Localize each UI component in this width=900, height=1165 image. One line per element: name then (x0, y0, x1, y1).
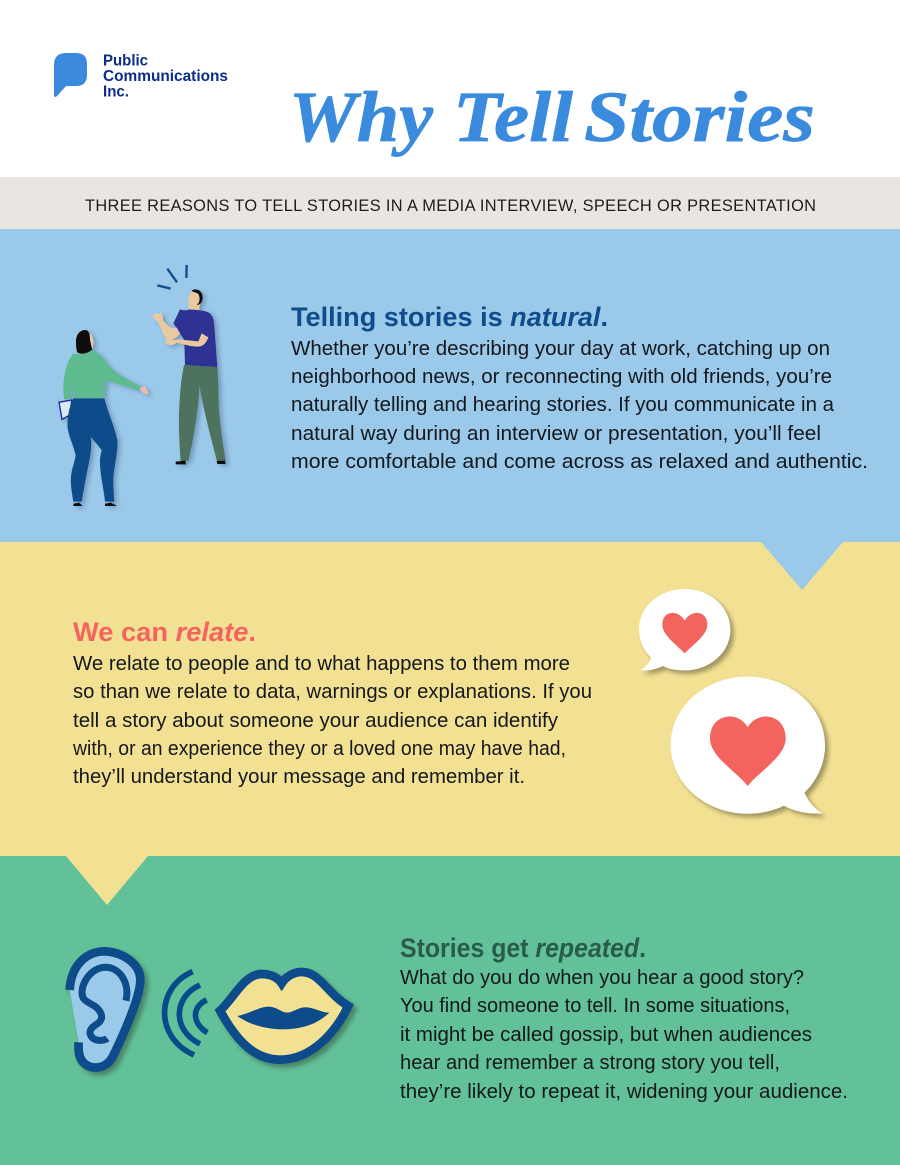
pointer: blue arrow (761, 542, 843, 590)
title (289, 77, 815, 157)
body text: tell a story about someone your audience can identify (73, 710, 558, 732)
body text: more comfortable and come across as relaxed and authentic. (291, 451, 868, 473)
body text: hear and remember a strong story you tell, (400, 1052, 780, 1074)
illustration: two people talking (59, 265, 226, 506)
body text: so than we relate to data, warnings or explanations. If you (73, 681, 592, 703)
woman (59, 330, 149, 506)
title: Tell (453, 77, 573, 157)
body text: natural way during an interview or presentation, you’ll feel (291, 423, 821, 445)
body text: they’re likely to repeat it, widening your audience. (400, 1081, 848, 1103)
body text (72, 653, 592, 788)
body text: neighborhood news, or reconnecting with old friends, you’re (291, 366, 832, 388)
pointer: yellow arrow (66, 856, 148, 905)
emphasis lines (157, 265, 187, 289)
body text: it might be called gossip, but when audiences (400, 1024, 812, 1046)
title: Why (289, 77, 434, 157)
man (152, 289, 226, 464)
body text: naturally telling and hearing stories. If you communicate in a (291, 394, 835, 416)
icon: ear, sound waves and lips (70, 951, 348, 1068)
heading: Stories get repeated. (400, 933, 646, 963)
logo: Public Communications Inc. (54, 52, 228, 100)
body text: they’ll understand your message and remember it. (73, 766, 525, 788)
icon: speech bubble logo (54, 53, 87, 97)
title: Stories (584, 77, 815, 157)
body text: You find someone to tell. In some situations, (400, 995, 790, 1017)
ear (70, 951, 140, 1068)
subtitle band (0, 177, 900, 229)
panel: relate (0, 542, 900, 856)
small bubble (639, 589, 730, 670)
heading: We can relate. (73, 617, 256, 647)
logo wordmark: Public (103, 52, 148, 70)
body text (400, 967, 848, 1103)
logo wordmark: Communications (103, 68, 228, 85)
logo wordmark: Inc. (103, 84, 129, 100)
body text: We relate to people and to what happens to them more (73, 653, 570, 675)
body text: What do you do when you hear a good story? (400, 967, 804, 989)
sound waves (165, 972, 207, 1055)
subtitle: THREE REASONS TO TELL STORIES IN A MEDIA INTERVIEW, SPEECH OR PRESENTATION (85, 197, 816, 215)
body text: with, or an experience they or a loved one may have had, (72, 738, 566, 760)
logo wordmark (103, 52, 228, 100)
heading: Telling stories is natural. (291, 302, 608, 332)
panel: natural (0, 229, 900, 542)
body text: Whether you’re describing your day at work, catching up on (291, 338, 830, 360)
large bubble (671, 677, 825, 814)
lips (220, 972, 348, 1060)
header background (0, 0, 900, 177)
body text (291, 338, 868, 473)
icon: speech bubbles with hearts (639, 589, 825, 814)
panel: repeated (0, 856, 900, 1165)
